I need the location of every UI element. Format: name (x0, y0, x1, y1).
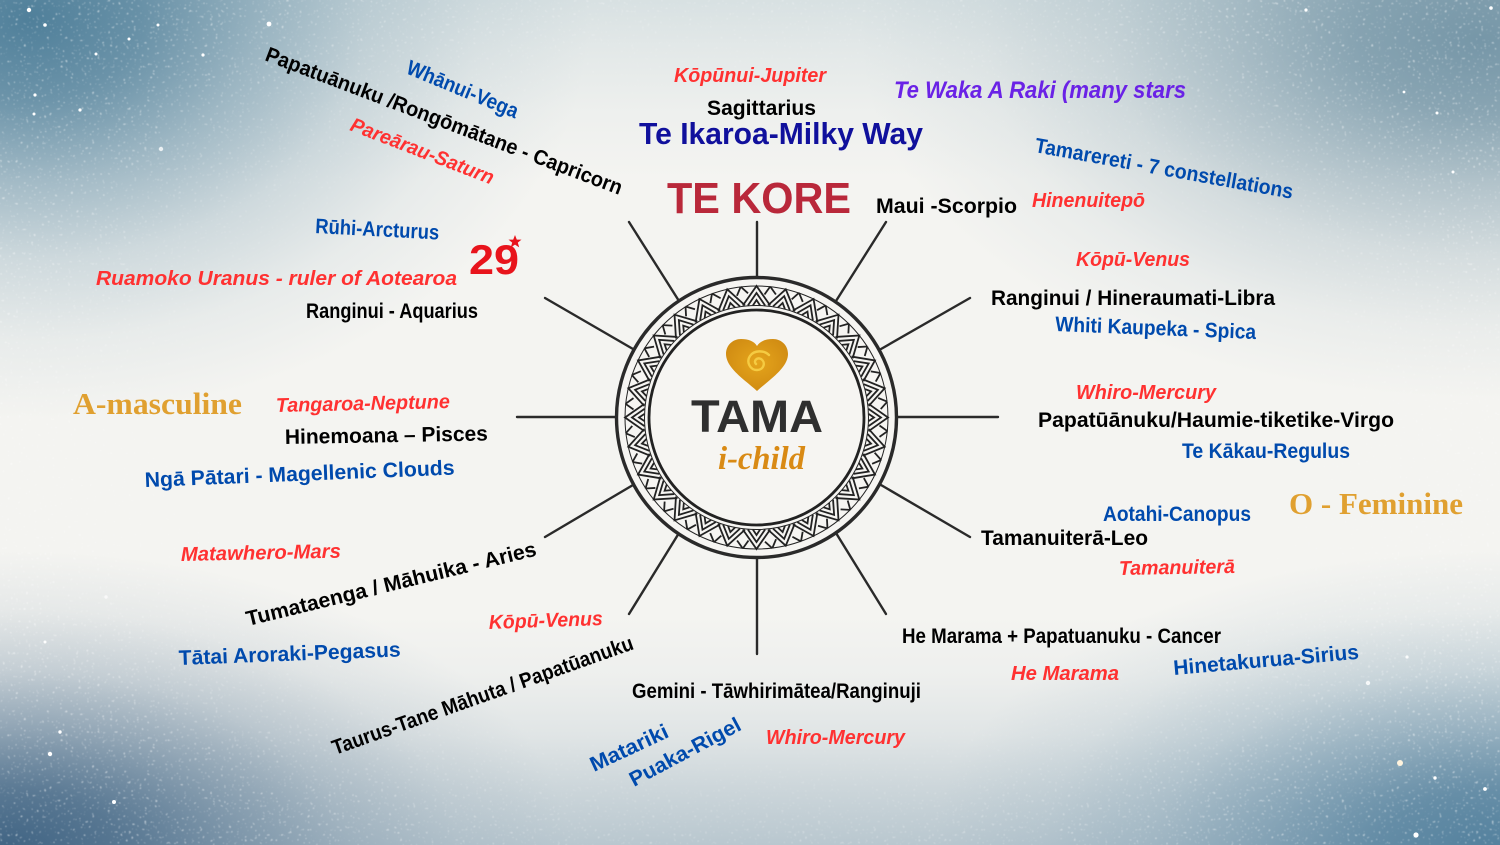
label: He Marama: He Marama (1011, 663, 1119, 685)
icon: golden heart with spiral (726, 339, 788, 391)
label: Matawhero-Mars: Matawhero-Mars (181, 541, 341, 566)
label: Ranginui / Hineraumati-Libra: Ranginui / Hineraumati-Libra (991, 287, 1275, 310)
logo word: TAMA: TAMA (691, 391, 823, 442)
label: Tamanuiterā: Tamanuiterā (1119, 556, 1235, 580)
heading: O - Feminine: O - Feminine (1289, 486, 1463, 521)
logo word: i-child: i-child (718, 441, 805, 477)
label: Matariki: Matariki (586, 720, 672, 777)
icon: red 29 with star: 29 (469, 236, 519, 283)
heading: A-masculine: A-masculine (73, 386, 242, 421)
label: Ranginui - Aquarius: Ranginui - Aquarius (306, 300, 478, 323)
label: Tamarereti: Tamarereti - 7 constellations (1033, 134, 1295, 204)
label: Maui -Scorpio: Maui -Scorpio (876, 195, 1017, 218)
label: Kōpūnui-Jupiter: Kōpūnui-Jupiter (674, 65, 827, 87)
heading: Te Ikaroa-Milky Way: Te Ikaroa-Milky Way (639, 116, 924, 151)
spokes radiating from the central medallion (517, 222, 998, 654)
label: He Marama + Papatuanuku - Cancer: He Marama + Papatuanuku - Cancer (902, 625, 1221, 648)
label: Hinenuitepō: Hinenuitepō (1032, 190, 1145, 212)
label: Papatuānuku /Rongōmātane - Capricorn: Papatuānuku /Rongōmātane - Capricorn (262, 43, 626, 200)
label: Tamanuiterā-Leo: Tamanuiterā-Leo (981, 527, 1148, 550)
label: Tātai Aroraki-Pegasus: Tātai Aroraki-Pegasus (178, 638, 401, 670)
label: Gemini: Gemini - Tāwhirimātea/Ranginuji (632, 680, 921, 703)
label: Whiro-Mercury bottom: Whiro-Mercury (766, 727, 906, 749)
label: Whiti Kaupeka - Spica: Whiti Kaupeka - Spica (1055, 313, 1257, 344)
label: Tumataenga: Tumataenga / Māhuika - Aries (244, 538, 539, 631)
label: Te Kākau-Regulus: Te Kākau-Regulus (1182, 440, 1350, 463)
label: Ruamoko Uranus: Ruamoko Uranus - ruler of Aotearoa (96, 268, 457, 290)
label: Pareārau-Saturn: Pareārau-Saturn (347, 114, 497, 189)
label: Rūhi-Arcturus: Rūhi-Arcturus (315, 215, 440, 244)
central medallion: TAMA i-child (616, 278, 896, 558)
label: Aotahi-Canopus: Aotahi-Canopus (1103, 503, 1251, 526)
heading: TE KORE: TE KORE (667, 174, 851, 223)
patterned ring (616, 278, 896, 558)
label: Taurus: Taurus-Tane Māhuta / Papatūanuku (329, 632, 636, 760)
label: Whānui-Vega: Whānui-Vega (403, 56, 522, 123)
label: Sagittarius: Sagittarius (707, 97, 816, 120)
label: Puaka-Rigel: Puaka-Rigel (626, 713, 745, 791)
label: Hinemoana: Hinemoana – Pisces (285, 422, 488, 449)
label: Whiro-Mercury right: Whiro-Mercury (1076, 382, 1217, 404)
label: Hinetakurua-Sirius: Hinetakurua-Sirius (1172, 641, 1360, 680)
label: Tangaroa-Neptune: Tangaroa-Neptune (276, 391, 450, 417)
label: Kōpū-Venus right: Kōpū-Venus (1076, 249, 1190, 271)
label: Te Waka A Raki: Te Waka A Raki (many stars (894, 77, 1186, 104)
label: Kōpū-Venus left: Kōpū-Venus (488, 608, 603, 634)
label: Papatūānuku/Haumie-tiketike-Virgo: Papatūānuku/Haumie-tiketike-Virgo (1038, 409, 1394, 432)
label: Ngā Pātari: Ngā Pātari - Magellenic Clouds (144, 457, 455, 492)
